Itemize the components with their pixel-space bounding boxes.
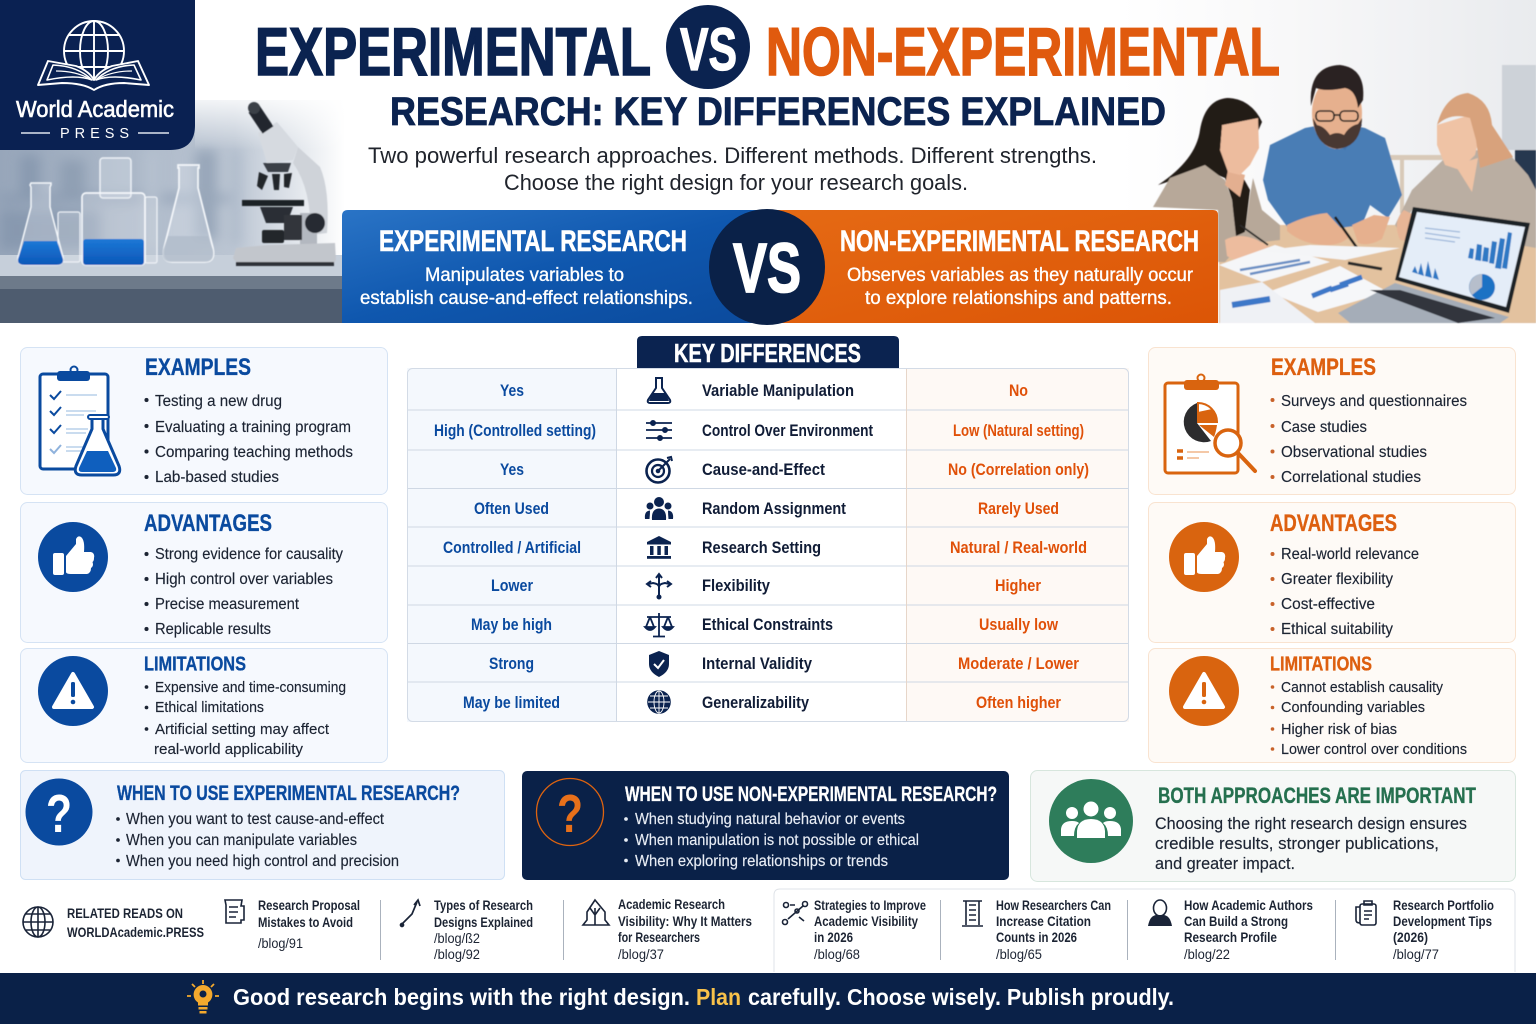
list: Evaluating a training program: [155, 419, 351, 436]
heading: EXAMPLES: [145, 354, 251, 381]
list: When studying natural behavior or events: [635, 811, 905, 828]
column: experimental values: Often Used: [474, 500, 549, 518]
related item 3: for Researchers: [618, 930, 700, 945]
list: Artificial setting may affect: [155, 721, 330, 738]
column: criteria: Variable Manipulation: [702, 382, 854, 400]
panel: non-experimental advantages: [1148, 502, 1516, 642]
related item 4: in 2026: [814, 930, 853, 945]
man: [1263, 122, 1402, 232]
related item 3: Visibility: Why It Matters: [618, 914, 752, 929]
related item 7: Research Portfolio: [1393, 898, 1494, 913]
column: non-experimental values: No (Correlation only): [948, 461, 1089, 479]
related item 1: Mistakes to Avoid: [258, 915, 353, 930]
related item 1: /blog/91: [258, 936, 303, 951]
list: When exploring relationships or trends: [635, 853, 888, 870]
body text: credible results, stronger publications,: [1155, 835, 1439, 853]
related reads heading: WORLDAcademic.PRESS: [67, 925, 204, 940]
related item 2: Designs Explained: [434, 915, 533, 930]
footer message: carefully. Choose wisely. Publish proudly.: [748, 984, 1174, 1010]
heading: LIMITATIONS: [1270, 652, 1372, 676]
related item 2: /blog/92: [434, 947, 480, 962]
banner: experimental research: EXPERIMENTAL RESEARCH: [379, 225, 687, 258]
list: Cannot establish causality: [1281, 679, 1443, 696]
icon: question mark: ?: [557, 784, 583, 844]
banner: non-experimental research: NON-EXPERIMENTAL RESEARCH: [840, 225, 1199, 258]
related item 7: [1356, 898, 1494, 962]
table: [1219, 225, 1536, 323]
panel: when to use experimental: [20, 770, 504, 880]
body text: Choosing the right research design ensures: [1155, 815, 1467, 833]
title: NON-EXPERIMENTAL: [766, 14, 1280, 90]
panel: non-experimental examples: [1148, 348, 1516, 494]
related reads strip: [23, 889, 1515, 972]
scene: researchers photo: [1120, 0, 1536, 323]
related item 6: Research Profile: [1184, 930, 1277, 945]
list: Confounding variables: [1281, 699, 1425, 716]
badge: VS: VS: [680, 16, 737, 83]
column: experimental values: [434, 382, 596, 712]
column: criteria: [702, 382, 873, 712]
column: non-experimental values: [948, 382, 1089, 712]
icon: question mark: ?: [46, 784, 72, 844]
list: Case studies: [1281, 419, 1367, 436]
list: High control over variables: [155, 571, 333, 588]
related item 5: Counts in 2026: [996, 930, 1077, 945]
list: Strong evidence for causality: [155, 546, 343, 563]
logo subline: PRESS: [60, 126, 129, 142]
panel: when to use non-experimental: [522, 771, 1009, 880]
column: experimental values: Lower: [491, 577, 533, 595]
icon: team: [1049, 779, 1133, 863]
list: Surveys and questionnaires: [1281, 393, 1467, 410]
column: experimental values: High (Controlled setting): [434, 422, 596, 440]
badge: VS: [666, 5, 750, 89]
list: [1271, 679, 1467, 758]
list: Observational studies: [1281, 444, 1427, 461]
related item 7: Development Tips: [1393, 914, 1492, 929]
logo block: [0, 0, 195, 150]
column: experimental values: Yes: [500, 461, 524, 479]
list: Higher risk of bias: [1281, 721, 1397, 738]
icon: thumbs up: [1169, 522, 1239, 592]
related item 5: [962, 898, 1111, 962]
related item 2: /blog/ß2: [434, 931, 480, 946]
list: real-world applicability: [154, 741, 304, 758]
intro text: [368, 143, 1097, 195]
related item 4: Academic Visibility: [814, 914, 918, 929]
related item 1: [225, 898, 360, 951]
title: EXPERIMENTAL: [255, 14, 651, 90]
icon: globe and book: [38, 21, 149, 90]
related item 6: How Academic Authors: [1184, 898, 1313, 913]
left woman: [1158, 98, 1262, 238]
related reads heading: RELATED READS ON: [67, 906, 183, 921]
title: [255, 5, 1280, 90]
list: Expensive and time-consuming: [155, 679, 346, 696]
column: criteria: Random Assignment: [702, 500, 846, 518]
list: Precise measurement: [155, 596, 300, 613]
column: criteria: Flexibility: [702, 577, 771, 595]
scene: laboratory photo: [0, 90, 345, 323]
heading: LIMITATIONS: [144, 652, 246, 676]
subtitle: RESEARCH: KEY DIFFERENCES EXPLAINED: [390, 90, 1166, 134]
banner: experimental research: establish cause-and-effect relationships.: [360, 287, 693, 309]
list: [116, 811, 399, 870]
column: experimental values: Yes: [500, 382, 524, 400]
list: When you can manipulate variables: [126, 832, 357, 849]
related item 7: /blog/77: [1393, 947, 1439, 962]
icon: warning: [38, 656, 108, 726]
column: criteria: Internal Validity: [702, 655, 813, 673]
heading: key differences: KEY DIFFERENCES: [674, 340, 861, 368]
column: experimental values: Strong: [489, 655, 534, 673]
related item 6: Can Build a Strong: [1184, 914, 1288, 929]
related item 3: [583, 897, 752, 962]
list: Ethical suitability: [1281, 621, 1393, 638]
column: experimental values: May be high: [471, 616, 552, 634]
icon: target: [646, 457, 672, 482]
icon: clipboard and flask: [40, 366, 120, 475]
column: experimental values: Controlled / Artificial: [443, 539, 581, 557]
right woman: [1395, 150, 1536, 248]
icon: globe: [648, 691, 670, 713]
body text: [1155, 815, 1467, 873]
footer bar: [0, 973, 1536, 1024]
related item 6: /blog/22: [1184, 947, 1230, 962]
icon: scales: [645, 613, 673, 636]
badge: large VS: [709, 209, 825, 325]
icon: question mark: [536, 778, 604, 846]
list: Testing a new drug: [155, 393, 282, 410]
related item 4: /blog/68: [814, 947, 860, 962]
panel: non-experimental limitations: [1148, 648, 1516, 762]
icon: branching arrows: [647, 574, 671, 598]
list: Replicable results: [155, 621, 271, 638]
icon: warning: [1169, 656, 1239, 726]
column: non-experimental values: Natural / Real-world: [950, 539, 1087, 557]
column: non-experimental values: Often higher: [976, 694, 1061, 712]
column: non-experimental values: Low (Natural setting): [953, 422, 1084, 440]
related reads heading: [23, 906, 204, 940]
related item 3: Academic Research: [618, 897, 725, 912]
banner: experimental research: [342, 210, 770, 323]
related item 6: [1148, 898, 1313, 962]
microscope: [233, 102, 336, 266]
footer message: Good research begins with the right design.: [233, 984, 690, 1010]
body text: and greater impact.: [1155, 855, 1295, 873]
list: Greater flexibility: [1281, 571, 1393, 588]
list: [145, 679, 346, 758]
related item 3: /blog/37: [618, 947, 664, 962]
heading: EXAMPLES: [1271, 354, 1376, 381]
related item 7: (2026): [1393, 930, 1428, 945]
related item 2: Types of Research: [434, 898, 533, 913]
list: Comparing teaching methods: [155, 444, 353, 461]
footer message: Plan: [696, 984, 741, 1010]
related item 4: [782, 898, 926, 962]
banner: non-experimental research: to explore relationships and patterns.: [865, 287, 1172, 309]
list: Ethical limitations: [155, 699, 264, 716]
badge: large VS: VS: [733, 229, 801, 307]
icon: thumbs up: [38, 522, 108, 592]
heading: ADVANTAGES: [144, 510, 272, 537]
panel: experimental examples: [20, 348, 388, 494]
icon: shield: [649, 651, 669, 677]
comparison table: [407, 368, 1129, 722]
list: When manipulation is not possible or ethical: [635, 832, 919, 849]
column: criteria: Cause-and-Effect: [702, 461, 825, 479]
intro text: Choose the right design for your research goals.: [504, 170, 968, 195]
related item 5: How Researchers Can: [996, 898, 1111, 913]
related item 5: Increase Citation: [996, 914, 1091, 929]
list: [1270, 546, 1419, 638]
papers on table: [1219, 245, 1330, 282]
logo wordmark: World Academic: [16, 96, 174, 122]
column: non-experimental values: Rarely Used: [978, 500, 1059, 518]
related item 1: Research Proposal: [258, 898, 360, 913]
list: Lower control over conditions: [1281, 741, 1467, 758]
column: non-experimental values: Usually low: [979, 616, 1058, 634]
panel: both approaches are important: [1030, 770, 1516, 882]
footer message: [233, 984, 1174, 1010]
column: non-experimental values: Higher: [995, 577, 1042, 595]
list: When you want to test cause-and-effect: [126, 811, 385, 828]
column: non-experimental values: No: [1009, 382, 1028, 400]
icon: clipboard with pie chart: [1165, 374, 1255, 473]
heading: WHEN TO USE NON-EXPERIMENTAL RESEARCH?: [625, 782, 997, 806]
column: criteria: Ethical Constraints: [702, 616, 833, 634]
list: Correlational studies: [1281, 469, 1421, 486]
list: Cost-effective: [1281, 596, 1375, 613]
intro text: Two powerful research approaches. Different methods. Different strengths.: [368, 143, 1097, 168]
heading: ADVANTAGES: [1270, 510, 1397, 537]
banner: experimental research: Manipulates variables to: [425, 264, 624, 286]
banner: non-experimental research: Observes variables as they naturally occur: [847, 264, 1193, 286]
list: Lab-based studies: [155, 469, 279, 486]
heading: WHEN TO USE EXPERIMENTAL RESEARCH?: [117, 781, 460, 805]
panel: experimental limitations: [20, 648, 388, 762]
icon: group of people: [645, 497, 673, 520]
list: Real-world relevance: [1281, 546, 1419, 563]
column: non-experimental values: Moderate / Lower: [958, 655, 1080, 673]
banner: non-experimental research: [770, 210, 1218, 323]
related item 2: [400, 898, 533, 962]
icon: sliders: [646, 420, 672, 440]
related item 4: Strategies to Improve: [814, 898, 926, 913]
icon: question mark: [26, 778, 92, 846]
list: [1270, 393, 1467, 486]
laptop: [1338, 283, 1509, 323]
panel: experimental advantages: [20, 502, 388, 642]
related item 5: /blog/65: [996, 947, 1042, 962]
list: [144, 393, 353, 486]
icon: lightbulb: [187, 980, 219, 1014]
icon: institution building: [647, 536, 671, 559]
icon: flask: [648, 378, 670, 403]
column: criteria: Research Setting: [702, 539, 821, 557]
column: criteria: Control Over Environment: [702, 422, 873, 440]
list: [624, 811, 919, 870]
glassware: [18, 158, 214, 265]
list: [144, 546, 343, 638]
column: criteria: Generalizability: [702, 694, 810, 712]
column: experimental values: May be limited: [463, 694, 560, 712]
list: When you need high control and precision: [126, 853, 399, 870]
